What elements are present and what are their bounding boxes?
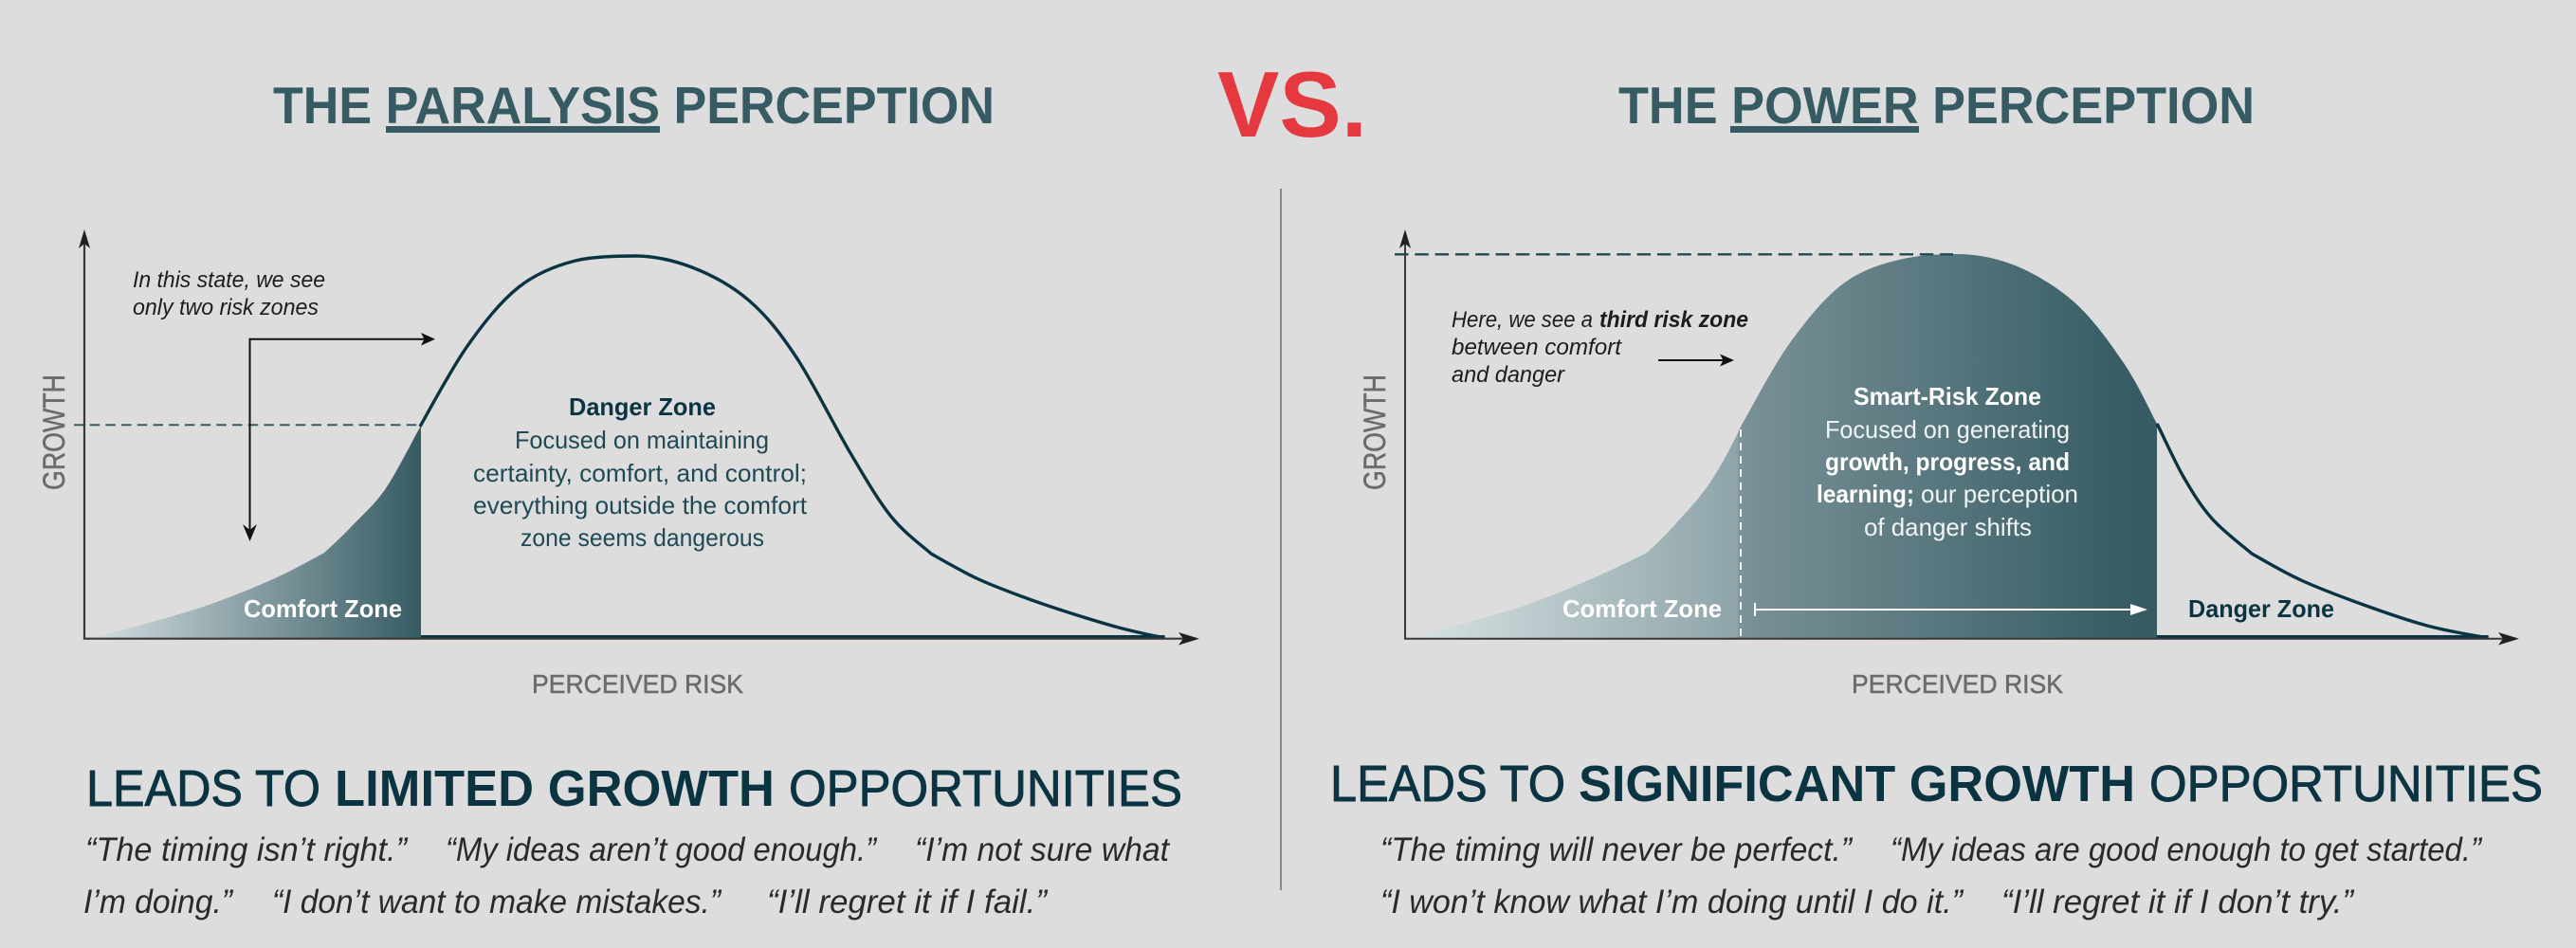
right conclusion heading: SIGNIFICANT GROWTH (1579, 756, 2135, 812)
annotation (133, 267, 325, 320)
dashed growth level (74, 424, 421, 426)
left quotes: “I’ll regret it if I fail.” (767, 884, 1048, 921)
smart-risk zone text: of danger shifts (1864, 513, 2032, 541)
danger zone text: zone seems dangerous (521, 523, 764, 552)
right quotes: “My ideas are good enough to get started.” (1891, 831, 2482, 868)
annotation: and danger (1452, 362, 1565, 388)
right quotes: “I’ll regret it if I don’t try.” (2001, 884, 2354, 921)
x axis label: PERCEIVED RISK (1852, 669, 2063, 699)
danger zone text: Focused on maintaining (515, 426, 769, 454)
comfort zone label: Comfort Zone (244, 594, 402, 623)
smart-risk zone text: learning; (1817, 480, 1914, 508)
left quotes (83, 831, 1170, 921)
panel: power chart (1358, 229, 2519, 699)
right quotes: “I won’t know what I’m doing until I do it.” (1380, 884, 1964, 921)
annotation: only two risk zones (133, 295, 319, 320)
comfort zone label: Comfort Zone (1562, 594, 1722, 623)
left conclusion heading: LIMITED GROWTH (335, 760, 775, 817)
danger zone text: certainty, comfort, and control; (473, 459, 807, 487)
left quotes: I’m doing.” (83, 884, 233, 921)
shift arrow (1755, 603, 2147, 616)
x axis label: PERCEIVED RISK (532, 669, 743, 699)
title: the paralysis perception: THE PARALYSIS PERCEPTION (273, 76, 995, 135)
elbow arrow (243, 333, 435, 541)
smart-risk zone text: Smart-Risk Zone (1854, 382, 2041, 410)
panel: paralysis chart (37, 229, 1199, 699)
annotation: In this state, we see (133, 267, 325, 293)
smart-risk zone text: our perception (1921, 480, 2078, 508)
danger zone label: Danger Zone (2188, 594, 2334, 623)
zones fill (1410, 254, 2157, 639)
comfort zone fill (92, 426, 421, 639)
danger curve (2157, 424, 2487, 637)
left quotes: “I’m not sure what (915, 831, 1170, 868)
danger zone text: Danger Zone (569, 392, 716, 421)
left quotes: “The timing isn’t right.” (85, 831, 408, 868)
left conclusion heading: LEADS TO (86, 760, 320, 817)
right quotes (1380, 831, 2482, 921)
center divider (1280, 189, 1282, 890)
title: the power perception: THE POWER PERCEPTION (1618, 76, 2255, 135)
axes (1399, 229, 2519, 645)
axes (79, 229, 1199, 645)
y axis label: GROWTH (37, 374, 71, 490)
smart-risk zone text: growth, progress, and (1825, 447, 2070, 476)
right conclusion heading: LEADS TO (1330, 756, 1565, 812)
annotation: third risk zone (1599, 307, 1748, 333)
y axis label: GROWTH (1358, 374, 1392, 490)
left conclusion heading (86, 760, 1182, 817)
annotation arrow (1658, 355, 1734, 366)
right quotes: “The timing will never be perfect.” (1380, 831, 1853, 868)
comfort boundary (1740, 429, 1742, 639)
right conclusion heading (1330, 756, 2543, 812)
right conclusion heading: OPPORTUNITIES (2149, 756, 2543, 812)
risk curve (420, 256, 1163, 637)
annotation (1452, 307, 1748, 388)
annotation: Here, we see a (1452, 307, 1593, 333)
danger zone text (473, 392, 808, 552)
left conclusion heading: OPPORTUNITIES (789, 760, 1182, 817)
smart-risk zone text: Focused on generating (1825, 415, 2070, 444)
smart-risk zone text (1817, 382, 2078, 541)
left quotes: “My ideas aren’t good enough.” (446, 831, 877, 868)
annotation: between comfort (1452, 335, 1622, 360)
dashed peak level (1395, 253, 1953, 255)
heading: VS.: VS. (1217, 52, 1367, 156)
left quotes: “I don’t want to make mistakes.” (272, 884, 722, 921)
danger zone text: everything outside the comfort (473, 491, 808, 520)
